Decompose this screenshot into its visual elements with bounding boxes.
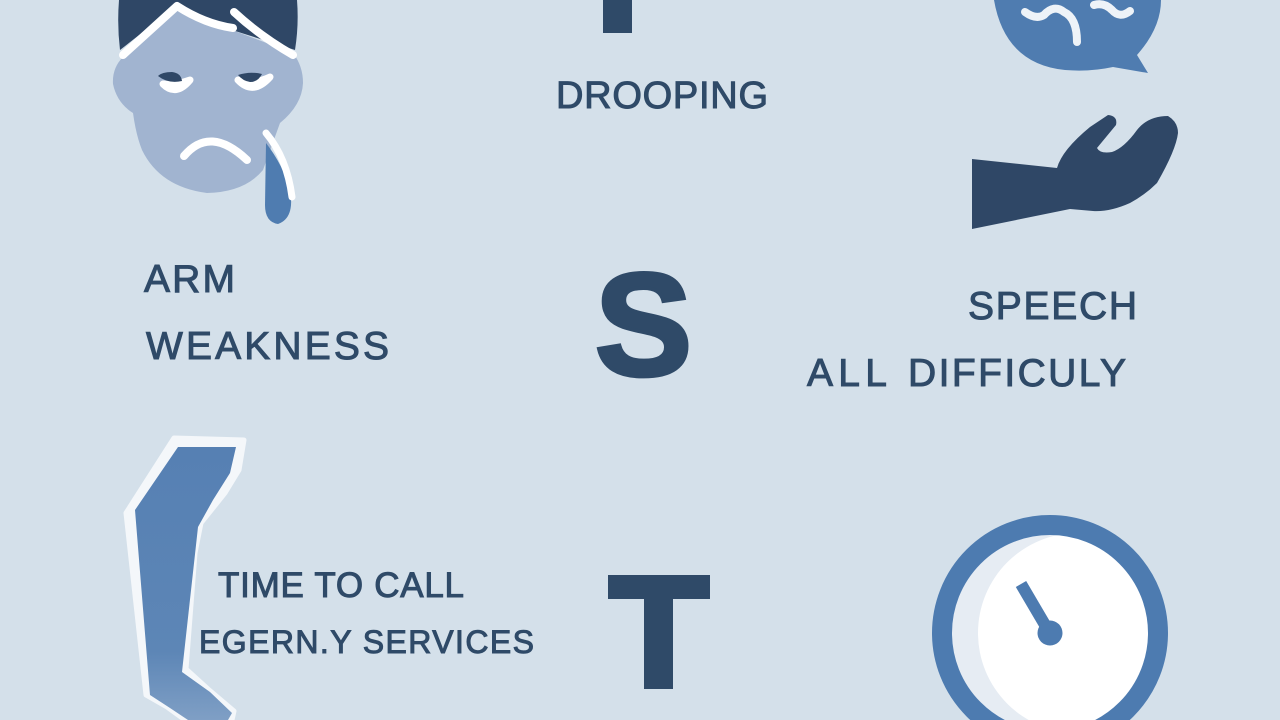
text: speech difficulty: SPEECH: [968, 285, 1137, 328]
icon: speech bubble: [994, 0, 1161, 73]
letter: S: S: [595, 243, 692, 406]
text: arm weakness: [144, 258, 389, 368]
icon: clock: [942, 525, 1178, 720]
text: arm weakness: WEAKNESS: [146, 325, 389, 368]
heading fragment: F letter stem: [603, 0, 632, 33]
letter: T: [608, 575, 710, 689]
text: speech difficulty: ALL: [807, 352, 887, 395]
text: speech difficulty: DIFFICULY: [908, 352, 1126, 395]
icon: leg: [126, 438, 244, 720]
text: time to call: [199, 566, 534, 660]
text: drooping: DROOPING: [556, 75, 768, 117]
icon: drooping face: [113, 0, 303, 224]
text: time to call: TIME TO CALL: [218, 566, 464, 605]
text: arm weakness: ARM: [144, 258, 235, 301]
icon: weak arm: [972, 115, 1178, 229]
text: speech difficulty: [807, 285, 1137, 395]
text: time to call: EGERN.Y SERVICES: [199, 624, 534, 660]
